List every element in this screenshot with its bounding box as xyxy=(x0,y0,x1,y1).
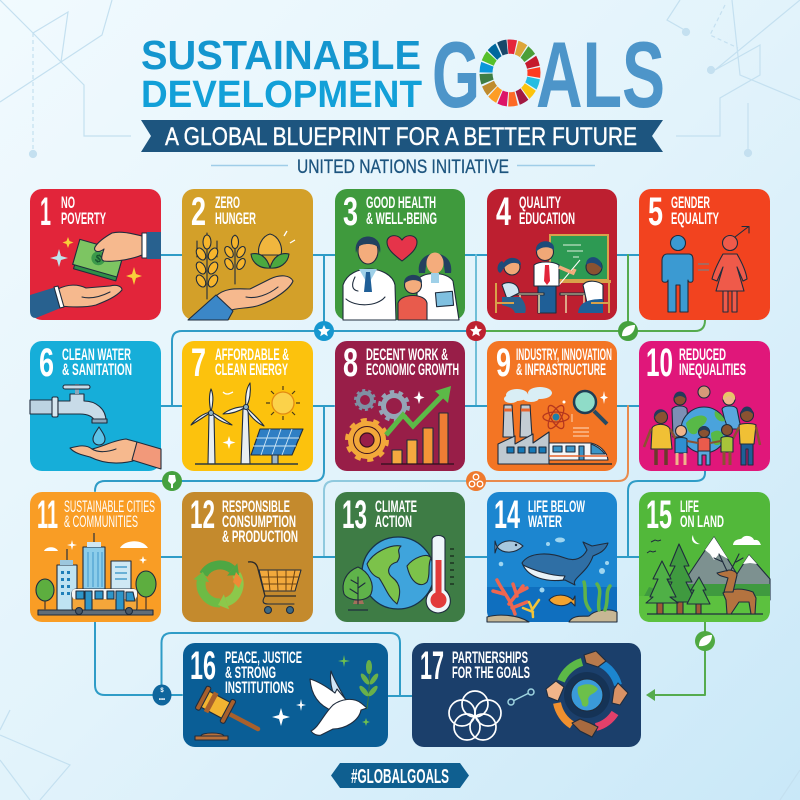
node: orange circles xyxy=(466,471,486,491)
node: justice symbols: $ xyxy=(160,688,164,694)
label: peace justice: & STRONG xyxy=(225,663,276,682)
icon: people around a globe xyxy=(644,386,760,465)
label: zero hunger xyxy=(215,193,256,228)
icon: tap, drop and hand xyxy=(30,384,161,469)
label: zero hunger: HUNGER xyxy=(215,209,256,228)
label: no poverty: POVERTY xyxy=(61,209,106,228)
label: gender equality: EQUALITY xyxy=(671,209,719,228)
label: no poverty: NO xyxy=(61,193,75,212)
panel: goal 1 no poverty xyxy=(30,189,161,320)
label: sustainable cities xyxy=(64,497,155,531)
banner: subtitle ribbon: A GLOBAL BLUEPRINT FOR A BETTER FUTURE xyxy=(165,123,637,151)
panel: goal 16 peace and justice: 16 xyxy=(190,644,216,688)
label: climate action: CLIMATE xyxy=(375,497,417,516)
label: partnerships: FOR THE GOALS xyxy=(452,663,530,682)
panel: goal 12 responsible consumption xyxy=(182,492,313,622)
panel: goal 3 good health: 3 xyxy=(343,190,358,234)
badge: global goals hashtag xyxy=(331,763,469,788)
panel: goal 9 industry xyxy=(487,341,617,471)
panel: goal 8 decent work xyxy=(335,341,465,471)
label: industry and innovation xyxy=(516,345,612,379)
icon: doctors, child and heart xyxy=(343,236,459,320)
panel: goal 8 decent work: 8 xyxy=(343,341,358,385)
connector network xyxy=(95,255,705,696)
label: partnerships: PARTNERSHIPS xyxy=(452,648,528,667)
icon: wind turbines and solar panel xyxy=(191,383,303,464)
label: responsible consumption: CONSUMPTION xyxy=(222,512,296,531)
icon: gavel xyxy=(195,686,258,740)
icon: city with bus xyxy=(36,533,156,615)
label: gender equality: GENDER xyxy=(671,193,710,212)
heading: Sustainable Development xyxy=(141,32,422,116)
label: life on land: ON LAND xyxy=(680,512,724,531)
node: leaf xyxy=(618,321,638,341)
label: clean energy: AFFORDABLE & xyxy=(215,345,289,364)
label: sustainable cities: & COMMUNITIES xyxy=(64,512,138,531)
panel: goal 10 reduced inequalities: 10 xyxy=(646,341,673,385)
panel: goal 10 reduced inequalities xyxy=(639,341,770,471)
icon: hands exchanging money: $ xyxy=(94,253,103,266)
arrow: into goal 17 xyxy=(646,689,655,701)
text: United Nations Initiative: UNITED NATIONS INITIATIVE xyxy=(297,157,509,178)
panel: goal 14 life below water: 14 xyxy=(494,493,520,537)
panel: goal 9 industry: INDUSTRY, INNOVATION xyxy=(516,345,612,364)
label: reduced inequalities: REDUCED xyxy=(679,345,726,364)
label: industry and innovation: & INFRASTRUCTURE xyxy=(516,360,606,379)
panel: goal 14 life below water xyxy=(487,492,617,622)
node: justice symbols xyxy=(152,684,172,706)
panel: goal 15 life on land xyxy=(639,492,770,622)
icon: interlocking rings xyxy=(449,691,501,740)
label: life below water xyxy=(528,497,586,531)
label: responsible consumption: RESPONSIBLE xyxy=(222,497,290,516)
icon: connected nodes xyxy=(508,689,534,705)
icon: equal man and woman xyxy=(662,226,749,312)
label: gender equality xyxy=(671,193,719,228)
panel: goal 17 partnerships: 17 xyxy=(420,644,444,688)
panel: goal 7 clean energy: 7 xyxy=(191,341,206,385)
icon: factory, train, atom and magnifier xyxy=(498,387,612,464)
label: life on land xyxy=(680,497,724,531)
heading: Sustainable Development: DEVELOPMENT xyxy=(141,74,422,116)
icon: dove with olive branch xyxy=(272,655,380,735)
label: zero hunger: ZERO xyxy=(215,193,240,212)
chart: gears, bars and rising arrow xyxy=(347,386,454,464)
label: good health xyxy=(366,193,437,228)
label: peace justice: PEACE, JUSTICE xyxy=(225,648,302,667)
heading: Goals: ALS xyxy=(536,22,665,127)
node: justice symbols: ••• xyxy=(159,697,165,703)
panel: goal 5 gender equality xyxy=(639,189,770,320)
label: peace justice: INSTITUTIONS xyxy=(225,678,294,697)
label: responsible consumption: & PRODUCTION xyxy=(222,527,298,546)
label: life below water: WATER xyxy=(528,512,562,531)
icon: wheat, seed and open hand xyxy=(188,231,295,320)
panel: goal 4 quality education: 4 xyxy=(496,190,512,234)
label: peace justice xyxy=(225,648,302,697)
panel: goal 5 gender equality: 5 xyxy=(648,190,663,234)
label: life on land: LIFE xyxy=(680,497,699,516)
label: partnerships xyxy=(452,648,530,682)
panel: goal 6 clean water: 6 xyxy=(39,341,54,385)
icon: recycling arrows and shopping cart xyxy=(194,562,301,614)
icon: earth, tree and thermometer xyxy=(343,536,454,613)
heading: Goals: G xyxy=(432,22,480,127)
panel: goal 7 clean energy xyxy=(182,341,313,471)
panel: goal 1 no poverty: 1 xyxy=(40,190,51,234)
label: clean energy: CLEAN ENERGY xyxy=(215,360,288,379)
icon: whale, fish and coral xyxy=(487,538,617,622)
heading: Sustainable Development: SUSTAINABLE xyxy=(141,32,421,78)
panel: goal 2 zero hunger: 2 xyxy=(191,190,206,234)
node: plug xyxy=(162,471,182,491)
label: clean energy xyxy=(215,345,289,379)
label: climate action xyxy=(375,497,417,531)
panel: goal 4 quality education xyxy=(487,189,617,320)
label: quality education: EDUCATION xyxy=(519,209,575,228)
title xyxy=(141,22,665,127)
label: responsible consumption xyxy=(222,497,298,546)
node: star xyxy=(314,321,334,341)
heading: Goals xyxy=(432,22,665,127)
label: reduced inequalities: INEQUALITIES xyxy=(679,360,746,379)
label: good health: & WELL-BEING xyxy=(366,209,437,228)
label: clean water: CLEAN WATER xyxy=(62,345,131,364)
label: quality education: QUALITY xyxy=(519,193,561,212)
panel: goal 12 responsible consumption: 12 xyxy=(190,493,215,537)
icon: hands ring around globe xyxy=(546,651,628,737)
label: good health: GOOD HEALTH xyxy=(366,193,436,212)
label: clean water xyxy=(62,345,132,379)
node: red star xyxy=(466,321,486,341)
label: sustainable cities: SUSTAINABLE CITIES xyxy=(64,497,155,516)
label: decent work xyxy=(366,345,459,379)
panel: goal 16 peace and justice xyxy=(183,643,388,747)
label: reduced inequalities xyxy=(679,345,746,379)
node: green leaf xyxy=(695,631,715,651)
label: decent work: DECENT WORK & xyxy=(366,345,448,364)
panel: goal 2 zero hunger xyxy=(182,189,313,320)
icon: forest, mountains and deer xyxy=(639,535,770,622)
badge: global goals hashtag: #GLOBALGOALS xyxy=(351,766,449,788)
panel: goal 6 clean water xyxy=(30,341,161,471)
label: no poverty xyxy=(61,193,106,228)
label: clean water: & SANITATION xyxy=(62,360,132,379)
label: quality education xyxy=(519,193,575,228)
label: decent work: ECONOMIC GROWTH xyxy=(366,360,459,379)
panel: goal 3 good health xyxy=(335,189,465,320)
panel: goal 13 climate action xyxy=(335,492,465,622)
panel: goal 11 sustainable cities: 11 xyxy=(37,493,58,537)
panel: goal 13 climate action: 13 xyxy=(342,493,367,537)
panel: goal 9 industry: 9 xyxy=(496,341,511,385)
panel: goal 15 life on land: 15 xyxy=(646,493,672,537)
label: climate action: ACTION xyxy=(375,512,412,531)
icon: classroom xyxy=(496,235,611,313)
label: life below water: LIFE BELOW xyxy=(528,497,586,516)
panel: goal 17 partnerships xyxy=(412,643,641,747)
panel: goal 11 sustainable cities xyxy=(30,492,161,622)
icon: SDG colour wheel xyxy=(476,36,544,110)
